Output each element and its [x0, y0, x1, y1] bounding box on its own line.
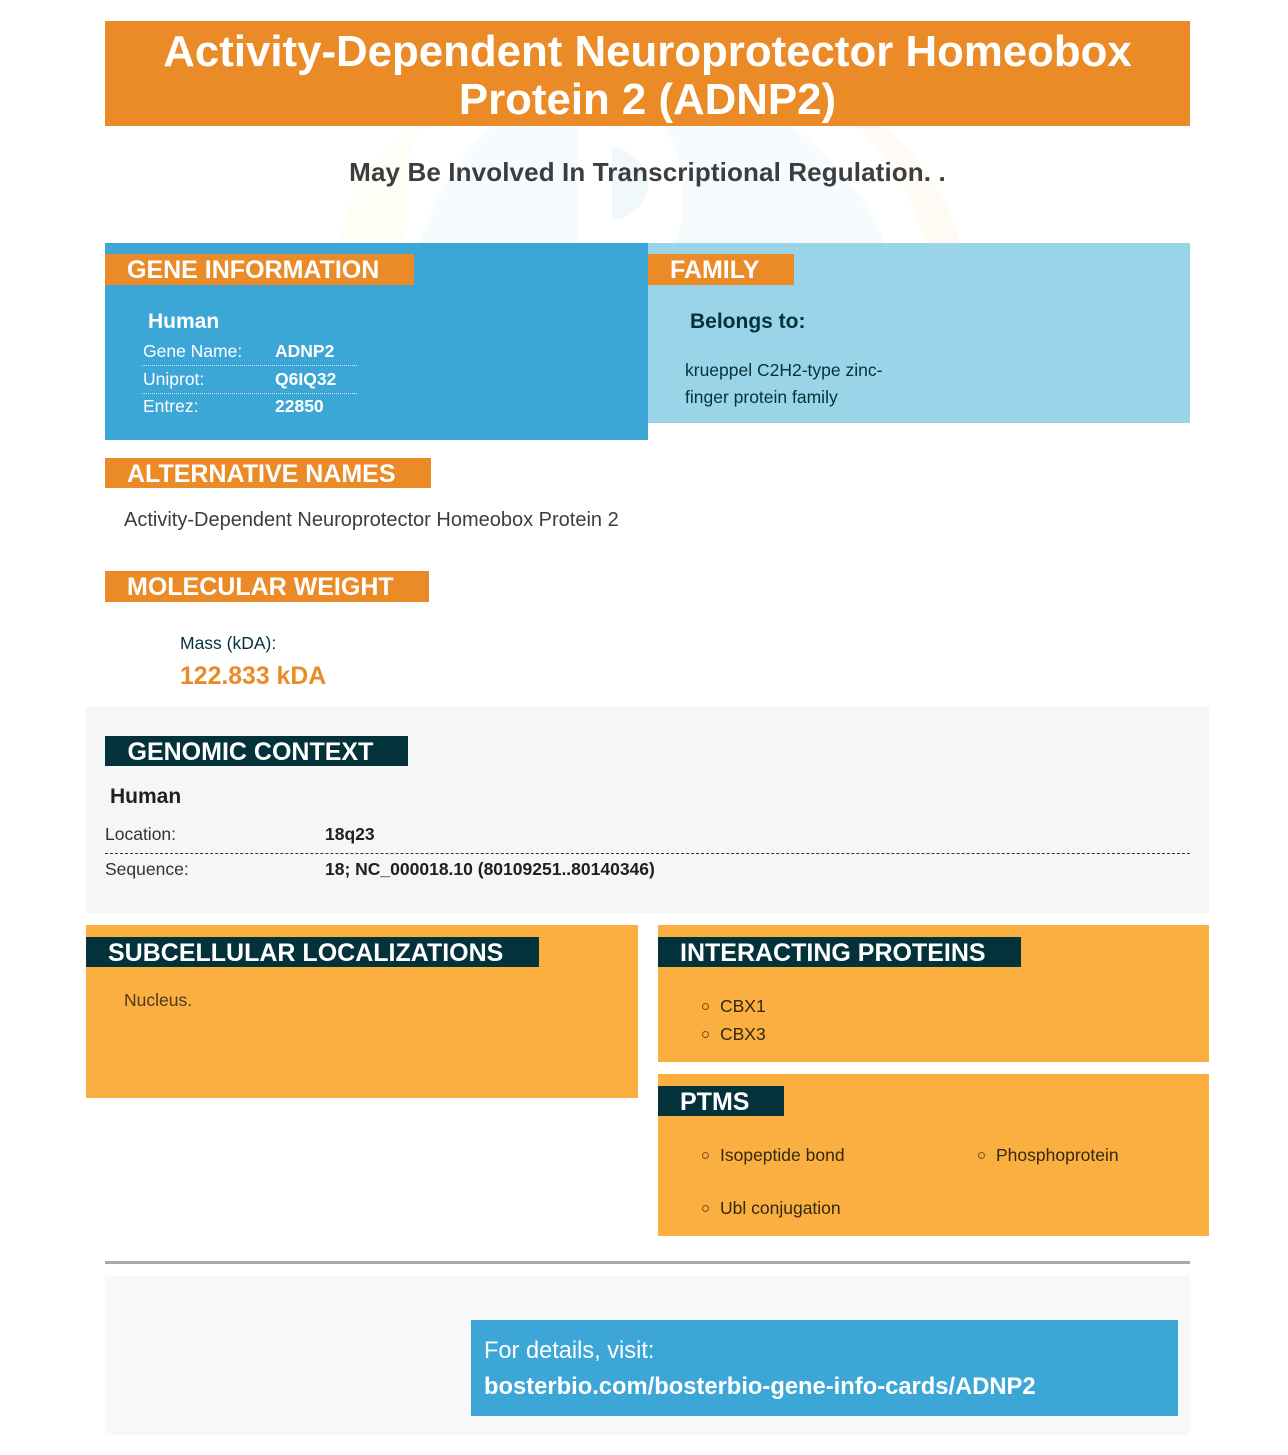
location row: 18q23: [325, 824, 375, 844]
entrez row: 22850: [275, 396, 324, 416]
list item: CBX3: CBX3: [720, 1024, 766, 1044]
list item: ubl conjugation: Ubl conjugation: [720, 1198, 841, 1218]
callout: details link: [471, 1320, 1178, 1416]
family description: [685, 360, 882, 407]
callout label: For details, visit:: [484, 1338, 654, 1364]
panel: gene information: [105, 243, 648, 440]
gene name row: [142, 340, 357, 366]
heading: gene information: GENE INFORMATION: [127, 256, 379, 284]
uniprot row: Q6IQ32: [275, 369, 336, 389]
species label: Human: [110, 785, 181, 808]
belongs to label: Belongs to:: [690, 310, 806, 333]
heading: genomic context: GENOMIC CONTEXT: [128, 738, 373, 766]
list item: isopeptide bond: Isopeptide bond: [720, 1145, 845, 1165]
sequence row: [105, 859, 655, 879]
uniprot row: Uniprot:: [143, 369, 204, 389]
panel: genomic context: [86, 707, 1209, 913]
gene name row: ADNP2: [275, 341, 334, 361]
heading: family: [648, 254, 794, 285]
uniprot row: [142, 368, 357, 394]
title banner: [105, 21, 1190, 126]
location row: Location:: [105, 824, 176, 844]
heading: molecular weight: MOLECULAR WEIGHT: [127, 573, 394, 601]
sequence row: 18; NC_000018.10 (80109251..80140346): [325, 859, 655, 879]
title banner: Protein 2 (ADNP2): [459, 75, 836, 124]
entrez row: Entrez:: [143, 396, 198, 416]
heading: ptms: [658, 1086, 784, 1116]
heading: subcellular localizations: SUBCELLULAR LOCALIZATIONS: [108, 939, 503, 967]
panel: footer: [105, 1276, 1190, 1435]
subtitle: May Be Involved In Transcriptional Regulation. .: [349, 157, 946, 187]
heading: ptms: PTMS: [680, 1088, 749, 1116]
panel: ptms: [658, 1074, 1209, 1236]
gene name row: Gene Name:: [143, 341, 242, 361]
mass value: 122.833 kDA: [180, 663, 326, 690]
sequence row: Sequence:: [105, 859, 189, 879]
panel: interacting proteins: [658, 925, 1209, 1062]
localization text: Nucleus.: [124, 990, 192, 1010]
callout url: bosterbio.com/bosterbio-gene-info-cards/ADNP2: [484, 1373, 1036, 1400]
family description: finger protein family: [685, 387, 838, 407]
list item: CBX1: CBX1: [720, 996, 766, 1016]
location row: [105, 823, 1190, 854]
watermark logo: [338, 126, 960, 243]
heading: interacting proteins: INTERACTING PROTEINS: [680, 939, 986, 967]
species label: Human: [148, 310, 219, 333]
mass label: Mass (kDA):: [180, 633, 276, 653]
heading: alternative names: ALTERNATIVE NAMES: [127, 460, 396, 488]
panel: family: [648, 243, 1190, 423]
list item: phosphoprotein: Phosphoprotein: [996, 1145, 1119, 1165]
title banner: Activity-Dependent Neuroprotector Homeobox: [163, 27, 1132, 76]
panel: subcellular localizations: [86, 925, 638, 1098]
heading: family: FAMILY: [670, 256, 759, 284]
family description: krueppel C2H2-type zinc-: [685, 360, 882, 380]
entrez row: [143, 396, 324, 416]
alternative names text: Activity-Dependent Neuroprotector Homeobox Protein 2: [124, 509, 619, 531]
